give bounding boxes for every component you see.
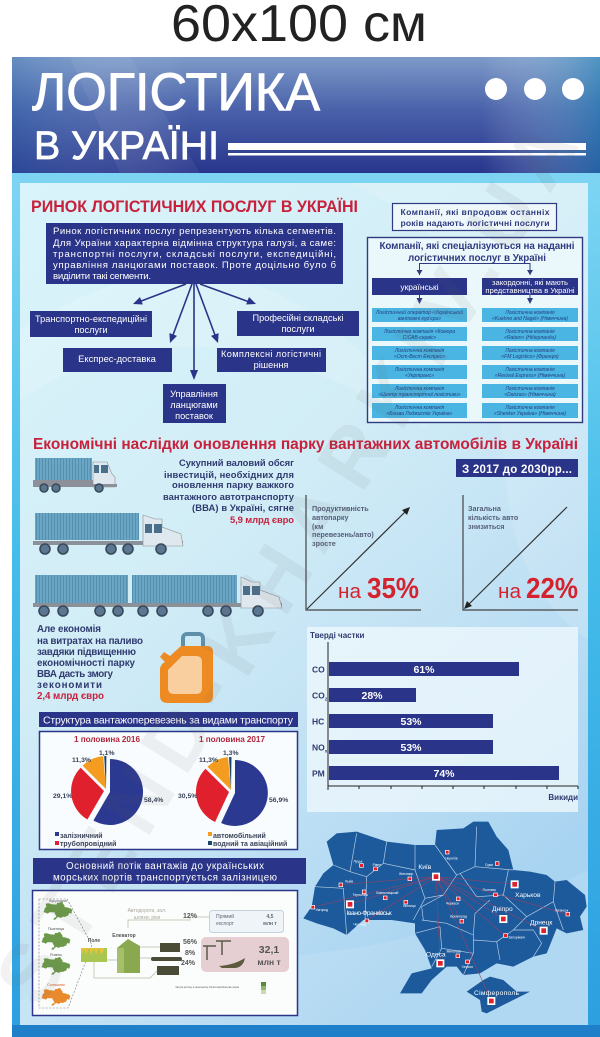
direct export box: експорт <box>216 921 235 927</box>
minor cities <box>311 850 570 964</box>
investment text: інвестицій, необхідних для <box>164 469 294 480</box>
pie legend: автомобільний <box>213 832 266 840</box>
fuel saving text: 2,4 млрд євро <box>37 691 104 702</box>
investment text: (ВВА) в Україні, сягне <box>192 502 294 513</box>
market description box: Для України характерна відмінна структура галузі, а саме: <box>53 238 336 249</box>
small city labels: Вінниця <box>403 904 416 908</box>
elevator: Елеватор <box>112 933 136 939</box>
chart: vehicles decline <box>463 495 578 610</box>
bar CO: CO <box>312 664 325 674</box>
share percentages: 8% <box>185 950 196 957</box>
ukrainian company list: «Бюзва Лоджистік Україна» <box>386 411 453 417</box>
bar NOx: NO <box>312 742 325 752</box>
segment: warehouse: Професійні складські <box>253 313 343 323</box>
pie 2017: 1,3% <box>223 750 238 757</box>
ukrainian company list: С/САВ-сервіс» <box>403 335 437 341</box>
oblast borders <box>315 827 563 975</box>
segment: warehouse <box>237 311 359 336</box>
panel heading: Компанії, які спеціалізуються на наданні <box>380 241 575 252</box>
segment: supply chain: Управління <box>170 389 218 399</box>
transport icons <box>151 943 182 975</box>
segment: supply chain <box>163 384 226 423</box>
chart: vehicles decline: 22% <box>526 573 578 605</box>
icon: road train <box>33 575 282 616</box>
icon: small truck <box>33 458 117 492</box>
small city labels: Львів <box>345 880 353 884</box>
column head: foreign: закордонні, які мають <box>492 278 568 287</box>
chart: vehicles decline: на <box>498 581 522 603</box>
title line 2: В УКРАЇНІ <box>34 124 219 168</box>
ukrainian company list: Логістична компанія «Комора <box>383 329 455 335</box>
fuel saving text: Але економія <box>37 624 101 635</box>
column head: ukrainian <box>372 278 467 295</box>
section heading: logistics market: РИНОК ЛОГІСТИЧНИХ ПОСЛУГ В УКРАЇНІ <box>31 197 358 216</box>
connector arrows <box>416 264 533 304</box>
heading: flow to sea ports: Основний потік вантажів до українських <box>66 861 264 872</box>
market description box <box>46 223 343 284</box>
pie 2016: 29,1% <box>53 793 72 800</box>
bar CO2: 2 <box>325 696 328 702</box>
segment: forwarding <box>30 311 152 337</box>
fuel saving text: ВВА дасть змогу <box>37 669 114 680</box>
foreign company list: Логістична компанія <box>504 310 555 316</box>
share percentages: 24% <box>181 960 196 967</box>
pie 2017: 1 половина 2017 <box>199 735 265 744</box>
bar CO: 61% <box>413 664 435 676</box>
pie 2017 <box>178 735 288 826</box>
foreign company list <box>482 308 578 418</box>
share percentages: 12% <box>183 913 198 920</box>
title rule lines <box>228 143 586 156</box>
share percentages: 56% <box>183 939 198 946</box>
flow lines <box>94 917 209 978</box>
pie 2017: 11,3% <box>199 757 218 764</box>
small city labels: Кіровоград <box>450 915 467 919</box>
road option labels <box>128 908 166 921</box>
market description box: виділити такі сегменти. <box>53 271 151 282</box>
foreign company list: «Danzas» (Німеччина) <box>504 392 556 398</box>
chart: productivity rises <box>306 495 421 610</box>
foreign company list: «Shenker Україна» (Німеччина) <box>494 411 566 417</box>
fuel saving text: завдяки підвищенню <box>37 647 136 658</box>
panel: specialised companies <box>368 238 582 422</box>
pie legend: трубопровідний <box>60 840 116 848</box>
ukrainian company list: «Укртранс» <box>405 373 434 379</box>
box: companies recent years: Компанії, які впродовж останніх <box>400 207 550 217</box>
small city labels: Луцьк <box>353 859 363 863</box>
investment text: вантажного автотранспорту <box>163 491 295 502</box>
port total box: млн т <box>257 957 281 967</box>
chart: productivity rises: 35% <box>367 573 419 605</box>
chart: productivity rises: Продуктивність <box>312 504 369 513</box>
map of Ukraine <box>303 822 587 1013</box>
port total box: 32,1 <box>259 944 279 956</box>
bar PM: 74% <box>433 768 455 780</box>
arrows to segments <box>133 284 256 380</box>
large city labels: Сімферополь <box>474 989 520 997</box>
foreign company list: Логістична компанія <box>504 367 555 373</box>
crop maps <box>39 899 92 1008</box>
foreign company list: «Revival Express» (Німеччина) <box>495 373 565 379</box>
small city labels: Чернігів <box>445 856 458 860</box>
crop maps: Пшениця <box>48 927 64 931</box>
pie 2017: 56,9% <box>269 797 288 804</box>
small city labels: Рівне <box>373 863 381 867</box>
chart: vehicles decline: Загальна <box>468 504 502 513</box>
large city labels: Київ <box>418 864 432 871</box>
segment: forwarding: Транспортно-експедиційні <box>35 314 147 324</box>
icon: semi truck <box>33 513 183 554</box>
small city labels: Хмельницький <box>376 891 399 895</box>
header band <box>12 57 600 173</box>
foreign company list: «FM Logistics» (Франція) <box>501 354 559 360</box>
bar PM <box>312 766 559 780</box>
direct export box: 4,5 <box>267 914 274 920</box>
ukrainian company list: «Центр транспортної логістики» <box>378 392 461 398</box>
bar HC <box>312 714 493 728</box>
investment text: Сукупний валовий обсяг <box>179 457 294 468</box>
bar CO2: CO <box>312 690 325 700</box>
large city labels: Одеса <box>426 951 446 958</box>
ukrainian company list: «Ост-Вест Експрес» <box>394 354 445 360</box>
ukrainian company list: Логістична компанія <box>394 405 445 411</box>
bar NOx: 53% <box>400 742 422 754</box>
small city labels: Суми <box>485 863 493 867</box>
chart: vehicles decline: знизиться <box>468 522 504 531</box>
crop maps: Ячмінь <box>50 953 62 957</box>
bar CO2 <box>312 688 416 702</box>
foreign company list: Логістична компанія <box>504 329 555 335</box>
freight routes <box>313 877 568 1001</box>
foreign company list: «Raben» (Нідерланди) <box>504 335 556 341</box>
large city labels: Дрнецк <box>530 919 552 926</box>
ukrainian company list: Логістичний оператор «Український <box>375 309 463 316</box>
crop maps: Соняшник <box>47 983 65 987</box>
field <box>81 938 107 962</box>
section heading: economic consequences: Економічні наслідки оновлення парку вантажних автомобілів в Україні <box>33 436 578 453</box>
large city labels <box>347 864 552 997</box>
bar NOx: x <box>325 748 328 754</box>
investment text: 5,9 млрд євро <box>230 514 294 525</box>
investment text: оновлення парку важкого <box>172 479 294 490</box>
road option labels: Автодороги, зал. <box>128 908 166 914</box>
share percentages <box>181 913 198 967</box>
foreign company list: Логістична компанія <box>504 348 555 354</box>
elevator <box>112 933 140 973</box>
period label: З 2017 до 2030рр... <box>462 464 572 476</box>
bar chart: emissions <box>307 627 578 812</box>
small city labels: Запоріжжя <box>508 936 525 940</box>
segment: supply chain: поставок <box>175 411 214 421</box>
heading: flow to sea ports <box>33 858 306 884</box>
ukrainian company list <box>372 308 467 418</box>
crop maps: Кукурудза <box>49 899 68 903</box>
bar chart: emissions: Викиди <box>548 793 578 802</box>
chart: productivity rises: (км <box>312 522 323 531</box>
direct export box <box>210 910 284 932</box>
small city labels: Черкаси <box>446 901 459 905</box>
direct export box: Прямий <box>216 913 234 920</box>
heading: freight structure: Структура вантажоперевезень за видами транспорту <box>43 716 294 726</box>
bar NOx <box>312 740 493 754</box>
fuel saving text: на витратах на паливо <box>37 636 143 647</box>
market description box: Ринок логістичних послуг репрезентують кілька сегментів. <box>53 226 336 237</box>
fuel saving text <box>37 624 143 702</box>
segment: warehouse: послуги <box>281 324 315 334</box>
ukrainian company list: Логістична компанія <box>394 367 445 373</box>
tiny note and legend: Частка регіону в загальному обсязі виробництва зерна <box>175 986 240 989</box>
column head: foreign <box>482 278 578 295</box>
pie legend: залізничний <box>60 832 103 840</box>
pie 2017: 30,5% <box>178 793 197 800</box>
small city labels: Херсон <box>462 965 473 969</box>
segment: forwarding: послуги <box>74 325 108 335</box>
segment: express <box>63 348 172 372</box>
direct export box: млн т <box>263 921 277 927</box>
bar HC: 53% <box>400 716 422 728</box>
three white dots <box>485 78 584 100</box>
bar chart: emissions: Тверді частки <box>310 631 365 640</box>
segment: express: Експрес-доставка <box>78 353 157 364</box>
large city labels: Івано-Франківськ <box>347 909 392 917</box>
port total box <box>201 937 289 972</box>
title line 1: ЛОГІСТИКА <box>32 63 321 122</box>
column head: foreign: представництва в Україні <box>485 286 575 295</box>
segment: complex solutions: Комплексні логістичні <box>221 349 321 359</box>
ukrainian company list: Логістична компанія <box>394 386 445 392</box>
large city labels: Харьков <box>515 892 541 899</box>
bar CO <box>312 662 519 676</box>
pie legend: водний та авіаційний <box>213 840 287 848</box>
small city labels: Миколаїв <box>447 949 461 953</box>
segment: complex solutions: рішення <box>254 360 288 370</box>
chart: productivity rises: зросте <box>312 539 336 548</box>
ukrainian company list: Логістична компанія <box>394 348 445 354</box>
panel heading: логістичних послуг в Україні <box>408 253 546 264</box>
column head: ukrainian: українські <box>400 282 439 292</box>
market description box: транспортні послуги, складські послуги, експедиційні, <box>53 249 336 260</box>
box: companies recent years <box>392 204 556 230</box>
pie legend <box>55 832 287 848</box>
market description box: управління ланцюгами поставок. Проте доцільно було б <box>53 260 336 271</box>
small city labels: Чернівці <box>353 922 367 926</box>
panel heading <box>380 241 575 264</box>
chart: productivity rises: перевезень/авто) <box>312 530 374 539</box>
segment: supply chain: ланцюгами <box>170 400 218 410</box>
foreign company list: Логістична компанія <box>504 386 555 392</box>
chart: vehicles decline: кількість авто <box>468 513 519 522</box>
small city labels: Житомир <box>399 872 413 876</box>
pie 2016: 11,3% <box>72 757 91 764</box>
investment text <box>163 457 295 525</box>
pie 2016: 1 половина 2016 <box>74 735 140 744</box>
fuel saving text: економічності парку <box>37 658 136 669</box>
large city labels: Дніпро <box>492 905 513 913</box>
chart: productivity rises: на <box>338 581 362 603</box>
foreign company list: «Kuehne and Nagel» (Німеччина) <box>492 316 568 322</box>
Crimea <box>467 977 530 1013</box>
panel: transport pie charts <box>40 732 298 850</box>
period label <box>456 459 578 477</box>
box: companies recent years: років надають логістичні послуги <box>400 218 550 228</box>
ukrainian company list: вантажні кур’єри» <box>398 316 441 322</box>
heading: flow to sea ports: морських портів транспортується залізницею <box>53 872 277 884</box>
small city labels: Ужгород <box>315 908 328 912</box>
field: Поле <box>88 938 100 944</box>
foreign company list: Логістична компанія <box>504 405 555 411</box>
icon: fuel canister <box>160 634 213 703</box>
bar HC: HC <box>312 716 324 726</box>
panel: grain logistics diagram <box>32 890 298 1016</box>
fuel saving text: зекономити <box>37 680 102 691</box>
segment: complex solutions <box>217 348 326 372</box>
road option labels: шляхи, ріки <box>134 915 160 921</box>
pie 2016: 58,4% <box>144 797 163 804</box>
small city labels <box>315 856 569 969</box>
small city labels: Тернопіль <box>353 893 368 897</box>
bar PM: PM <box>312 768 325 778</box>
pie 2016 <box>53 735 163 825</box>
bar CO2: 28% <box>361 690 383 702</box>
major cities <box>346 873 548 1005</box>
tiny note and legend <box>175 982 266 994</box>
small city labels: Луганськ <box>555 909 569 913</box>
chart: productivity rises: автопарку <box>312 513 348 522</box>
small city labels: Полтава <box>483 888 496 892</box>
pie 2016: 1,1% <box>99 750 114 757</box>
